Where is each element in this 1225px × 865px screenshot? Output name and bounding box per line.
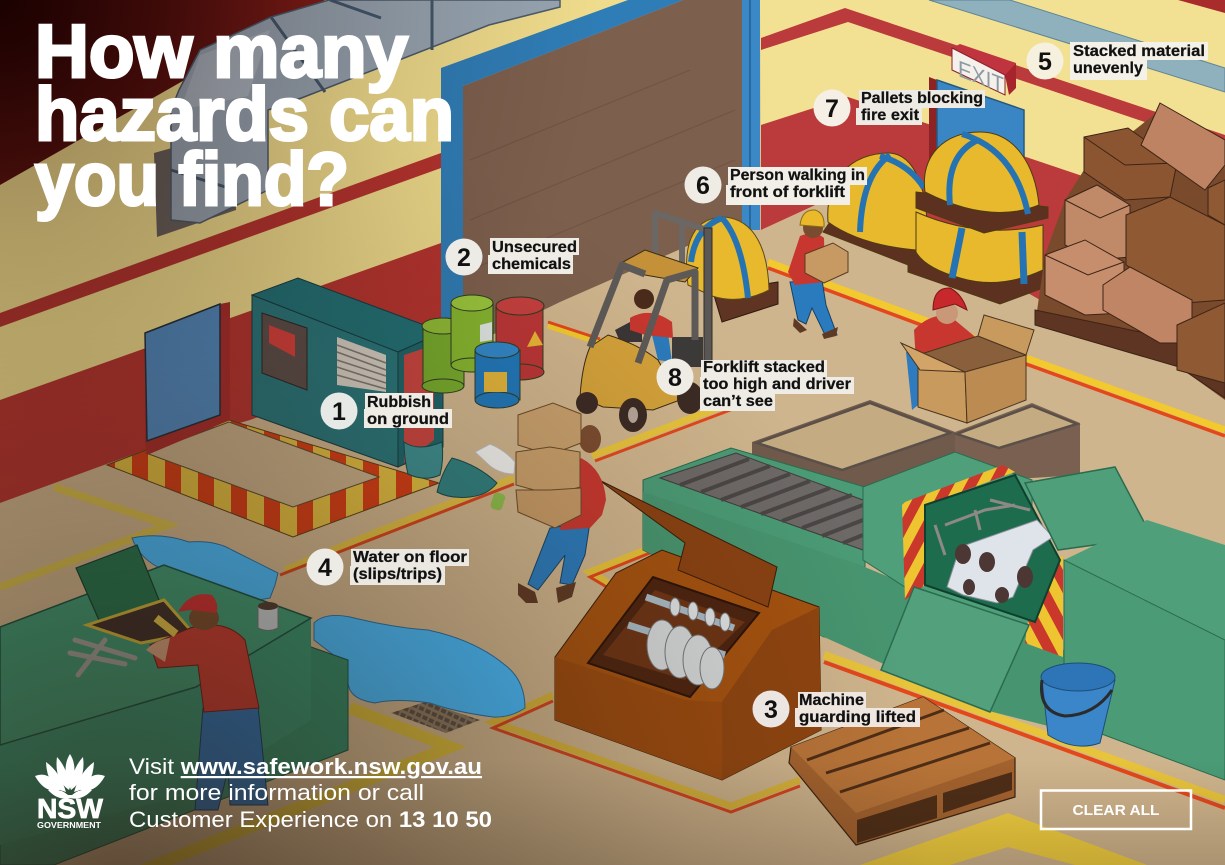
loose wooden pallet	[789, 697, 1015, 845]
callout 5: stacked material unevenly: 5	[1038, 48, 1052, 76]
callout 4: water on floor: 4	[318, 554, 332, 582]
callout 7: pallets blocking fire exit: Pallets blocking	[861, 90, 983, 107]
callout 6: person walking in front of forklift: front of forklift	[730, 184, 845, 201]
blue bucket	[1041, 663, 1115, 746]
callout 3: machine guarding lifted	[752, 690, 920, 728]
callout 6: person walking in front of forklift: 6	[696, 172, 710, 200]
hazard striped base	[107, 420, 439, 537]
EXIT sign: EXIT	[958, 56, 1004, 100]
water puddles and floor drain	[132, 536, 525, 733]
air duct on left wall	[154, 0, 560, 237]
callout 8: forklift stacked too high	[656, 358, 854, 411]
NSW Government logo	[35, 754, 105, 830]
callout 3: machine guarding lifted: guarding lifted	[799, 709, 916, 726]
forklift	[576, 213, 712, 432]
callout 4: water on floor	[306, 548, 469, 586]
callout 8: forklift stacked too high: too high and driver	[703, 376, 851, 393]
callout 2: unsecured chemicals: Unsecured	[492, 239, 577, 256]
right wall with red band	[760, 0, 1225, 340]
contact information: Customer Experience on 13 10 50	[129, 807, 492, 832]
callout 2: unsecured chemicals	[446, 238, 579, 276]
callout 2: unsecured chemicals: chemicals	[492, 256, 571, 273]
callout 6: person walking in front of forklift: Person walking in	[730, 167, 865, 184]
big yellow floor chevron	[860, 813, 1147, 865]
callout 6: person walking in front of forklift	[684, 166, 867, 205]
stacked cartons, uneven	[1035, 103, 1225, 400]
callout 1: rubbish on ground: on ground	[367, 411, 449, 428]
worker packing box	[901, 288, 1034, 423]
fire exit door	[929, 77, 1024, 185]
title: you find?	[35, 137, 349, 221]
callout 7: pallets blocking fire exit: 7	[825, 95, 839, 123]
callout 5: stacked material unevenly	[1026, 42, 1208, 80]
callout 5: stacked material unevenly: Stacked material	[1073, 43, 1205, 60]
chemical drums	[422, 295, 544, 408]
clear all button: CLEAR ALL	[1072, 803, 1160, 819]
callout 2: unsecured chemicals: 2	[457, 244, 471, 272]
EXIT sign	[952, 44, 1016, 100]
callout 1: rubbish on ground	[320, 392, 452, 430]
callout 7: pallets blocking fire exit: fire exit	[861, 107, 919, 124]
small blue door	[145, 302, 230, 455]
callout 1: rubbish on ground: Rubbish	[367, 394, 431, 411]
callout 8: forklift stacked too high: 8	[668, 364, 682, 392]
worker carrying stacked boxes	[516, 403, 606, 603]
contact information: for more information or call	[129, 780, 424, 805]
worker walking with box in front of forklift	[788, 210, 848, 339]
callout 8: forklift stacked too high: Forklift stacked	[703, 359, 825, 376]
callout 5: stacked material unevenly: unevenly	[1073, 60, 1143, 77]
callout 4: water on floor: Water on floor	[353, 549, 467, 566]
bag pile on pallets	[823, 132, 1048, 304]
platforms	[752, 400, 1080, 490]
rubbish on ground	[404, 442, 515, 511]
yellow bag behind forklift	[687, 217, 778, 322]
duct on right wall	[929, 0, 1225, 92]
contact information	[129, 754, 492, 832]
NSW Government logo: GOVERNMENT	[37, 821, 101, 830]
teal electrical cabinet	[252, 278, 443, 467]
callout 1: rubbish on ground: 1	[332, 398, 346, 426]
roller door and blue frame	[441, 0, 760, 350]
title: How many	[35, 9, 408, 93]
floor safety lines	[0, 262, 1225, 865]
callout 3: machine guarding lifted: 3	[764, 696, 778, 724]
clear all button	[1041, 790, 1191, 829]
callout 3: machine guarding lifted: Machine	[799, 692, 864, 709]
callout 8: forklift stacked too high: can’t see	[703, 393, 773, 410]
left wall	[0, 0, 640, 503]
contact information: Visit www.safework.nsw.gov.au	[129, 754, 482, 779]
title: hazards can	[35, 72, 454, 156]
callout 7: pallets blocking fire exit	[814, 90, 985, 126]
title	[35, 9, 454, 221]
callout 4: water on floor: (slips/trips)	[353, 566, 442, 583]
green workbench with mechanic	[0, 545, 348, 865]
conveyor machine	[643, 448, 1225, 780]
NSW Government logo: NSW	[37, 793, 104, 824]
orange machine with lifted guard	[555, 480, 821, 780]
